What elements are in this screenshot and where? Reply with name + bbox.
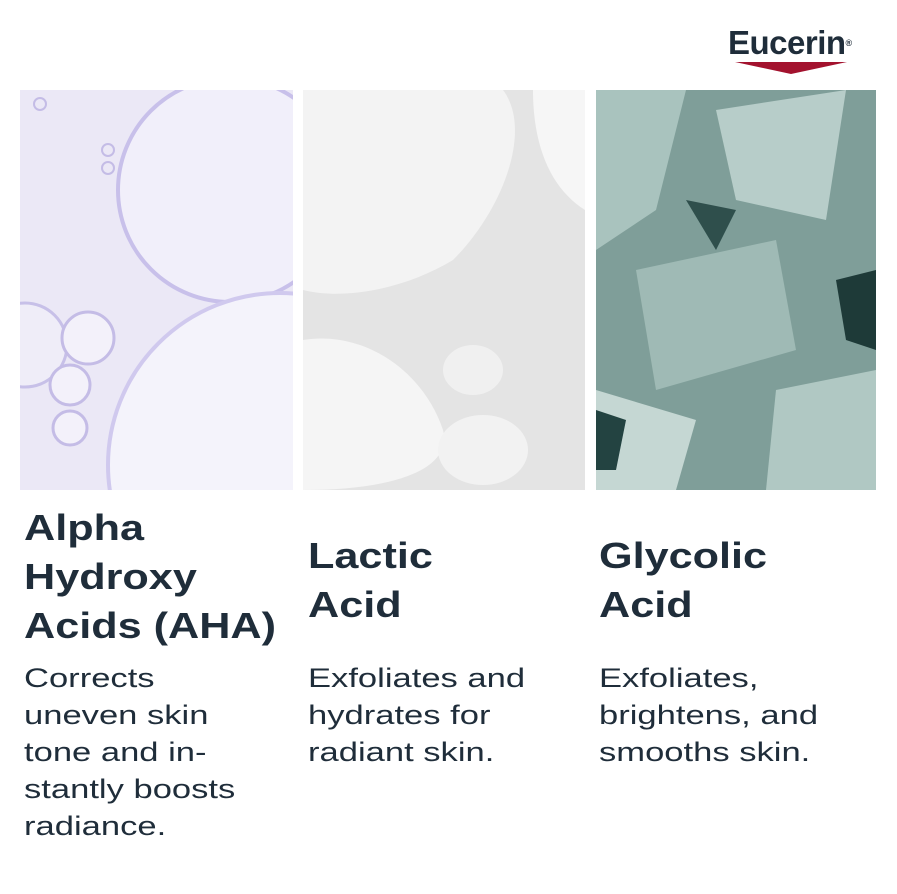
- text: Glycolic: Exfoliates,: [599, 663, 758, 693]
- text: AHA: stantly boosts: [24, 774, 235, 804]
- heading: Glycolic: Glycolic: [599, 535, 767, 576]
- heading: AHA: [24, 507, 276, 646]
- heading: AHA: Hydroxy: [24, 556, 197, 597]
- text: AHA: uneven skin: [24, 700, 208, 730]
- image: lactic acid: [303, 90, 585, 490]
- image: AHA bubbles: [20, 90, 293, 490]
- logo: Eucerin®: [728, 24, 852, 61]
- text: Lactic: [308, 663, 525, 767]
- heading: AHA: Acids (AHA): [24, 605, 276, 646]
- text: AHA: tone and in-: [24, 737, 207, 767]
- text: AHA: Corrects: [24, 663, 155, 693]
- text: Lactic: Exfoliates and: [308, 663, 525, 693]
- text: Glycolic: [599, 663, 818, 767]
- heading: AHA: Alpha: [24, 507, 144, 548]
- text: Glycolic: brightens, and: [599, 700, 818, 730]
- heading: Lactic: Lactic: [308, 535, 433, 576]
- heading: Glycolic: Acid: [599, 584, 693, 625]
- text: AHA: radiance.: [24, 811, 166, 841]
- image: glycolic acid: [596, 90, 876, 490]
- text: Lactic: radiant skin.: [308, 737, 494, 767]
- heading: Lactic: [308, 535, 433, 625]
- heading: Glycolic: [599, 535, 767, 625]
- text: Glycolic: smooths skin.: [599, 737, 810, 767]
- heading: Lactic: Acid: [308, 584, 402, 625]
- text: AHA: [24, 663, 235, 841]
- text: Lactic: hydrates for: [308, 700, 490, 730]
